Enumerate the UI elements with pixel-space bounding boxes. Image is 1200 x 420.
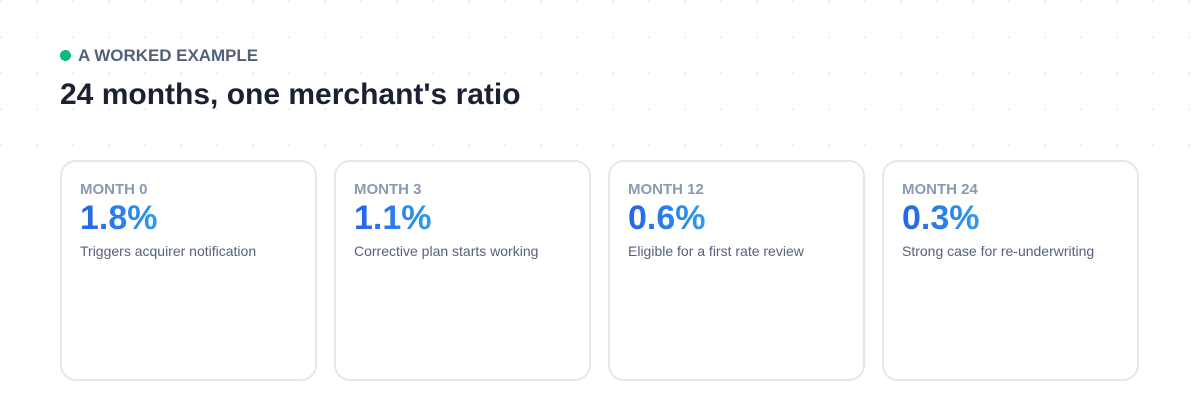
description: Eligible for a first rate review (628, 243, 804, 259)
description: Strong case for re-underwriting (902, 243, 1094, 259)
card: month 12 (608, 160, 865, 381)
description: Triggers acquirer notification (80, 243, 256, 259)
ratio value: 1.8% (80, 199, 158, 237)
icon: green status dot (60, 50, 71, 61)
panel: timeline cards (60, 160, 1139, 381)
eyebrow label (60, 46, 258, 65)
eyebrow text: A WORKED EXAMPLE (78, 46, 258, 65)
month label: MONTH 3 (354, 181, 422, 198)
ratio value: 0.6% (628, 199, 706, 237)
month label: MONTH 24 (902, 181, 978, 198)
month label: MONTH 12 (628, 181, 704, 198)
ratio value: 1.1% (354, 199, 432, 237)
card: month 3 (334, 160, 591, 381)
card: month 0 (60, 160, 317, 381)
card: month 24 (882, 160, 1139, 381)
ratio value: 0.3% (902, 199, 980, 237)
description: Corrective plan starts working (354, 243, 538, 259)
title: 24 months, one merchant's ratio (60, 78, 521, 111)
month label: MONTH 0 (80, 181, 148, 198)
